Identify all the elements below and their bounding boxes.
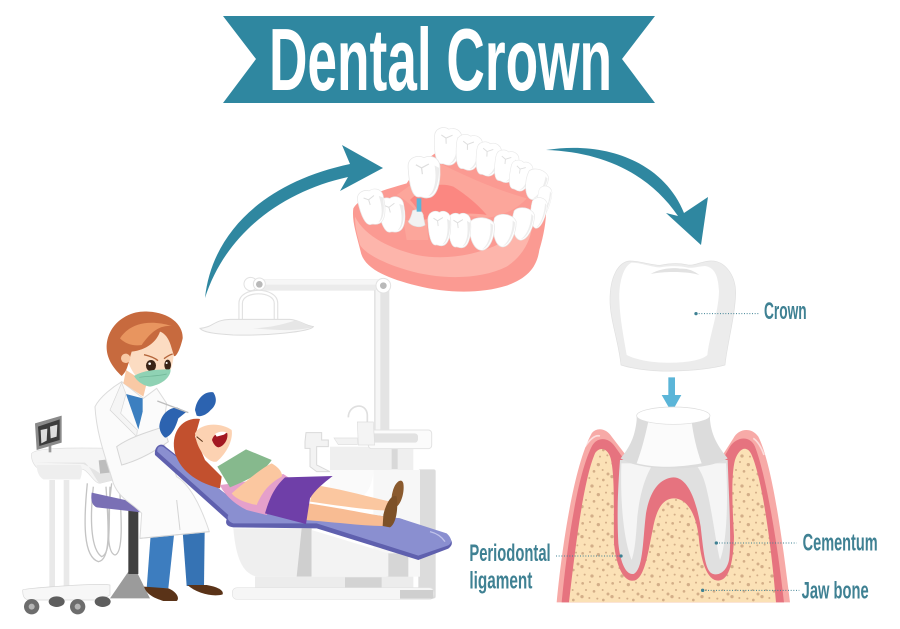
patient — [174, 419, 404, 527]
gloves — [159, 407, 187, 438]
gum — [353, 150, 546, 292]
arrow: dentist to denture — [205, 145, 383, 298]
shoes — [144, 587, 178, 601]
trousers — [147, 535, 174, 588]
back teeth — [432, 127, 553, 218]
denture with missing tooth — [353, 127, 553, 292]
front teeth — [356, 188, 549, 251]
dental treatment scene — [23, 277, 452, 614]
blue guide pin — [417, 198, 421, 212]
chair base and unit — [232, 406, 436, 599]
crown — [610, 261, 736, 371]
label: jaw bone — [701, 577, 869, 604]
shoes — [392, 481, 404, 507]
blue placement arrow — [662, 377, 681, 412]
eyes — [146, 360, 156, 371]
dentist stool — [91, 493, 150, 598]
instrument cart — [23, 448, 122, 614]
floating crown — [408, 156, 440, 198]
hair — [174, 419, 222, 488]
pink dress — [220, 474, 290, 515]
label: periodontal ligament: Periodontal — [469, 540, 551, 567]
face mask — [134, 369, 171, 387]
dentist — [95, 312, 223, 601]
neck and head — [123, 370, 147, 397]
label: periodontal ligament — [469, 540, 623, 594]
open mouth — [212, 432, 227, 447]
title banner — [223, 10, 655, 109]
label: periodontal ligament: ligament — [469, 567, 532, 594]
green shirt — [217, 449, 272, 487]
label: cementum — [715, 530, 878, 557]
tooth root — [618, 460, 730, 574]
hair — [107, 312, 183, 376]
label: crown — [694, 298, 807, 325]
x-ray monitor — [35, 416, 62, 452]
prepared tooth stub — [408, 210, 425, 227]
lab coat — [95, 382, 209, 538]
label: crown: Crown — [764, 298, 807, 325]
tooth anatomy diagram — [469, 261, 878, 604]
skirt — [265, 476, 333, 524]
arrow: denture to crown — [546, 148, 708, 245]
dental lamp and arm — [200, 277, 391, 432]
gum and bone — [557, 429, 790, 602]
ribbon — [223, 16, 655, 103]
prepared abutment — [621, 407, 728, 468]
dental chair cushion — [155, 445, 452, 560]
title text: Dental Crown — [269, 10, 612, 109]
arm — [232, 463, 282, 505]
legs — [310, 485, 391, 511]
head — [195, 425, 232, 462]
